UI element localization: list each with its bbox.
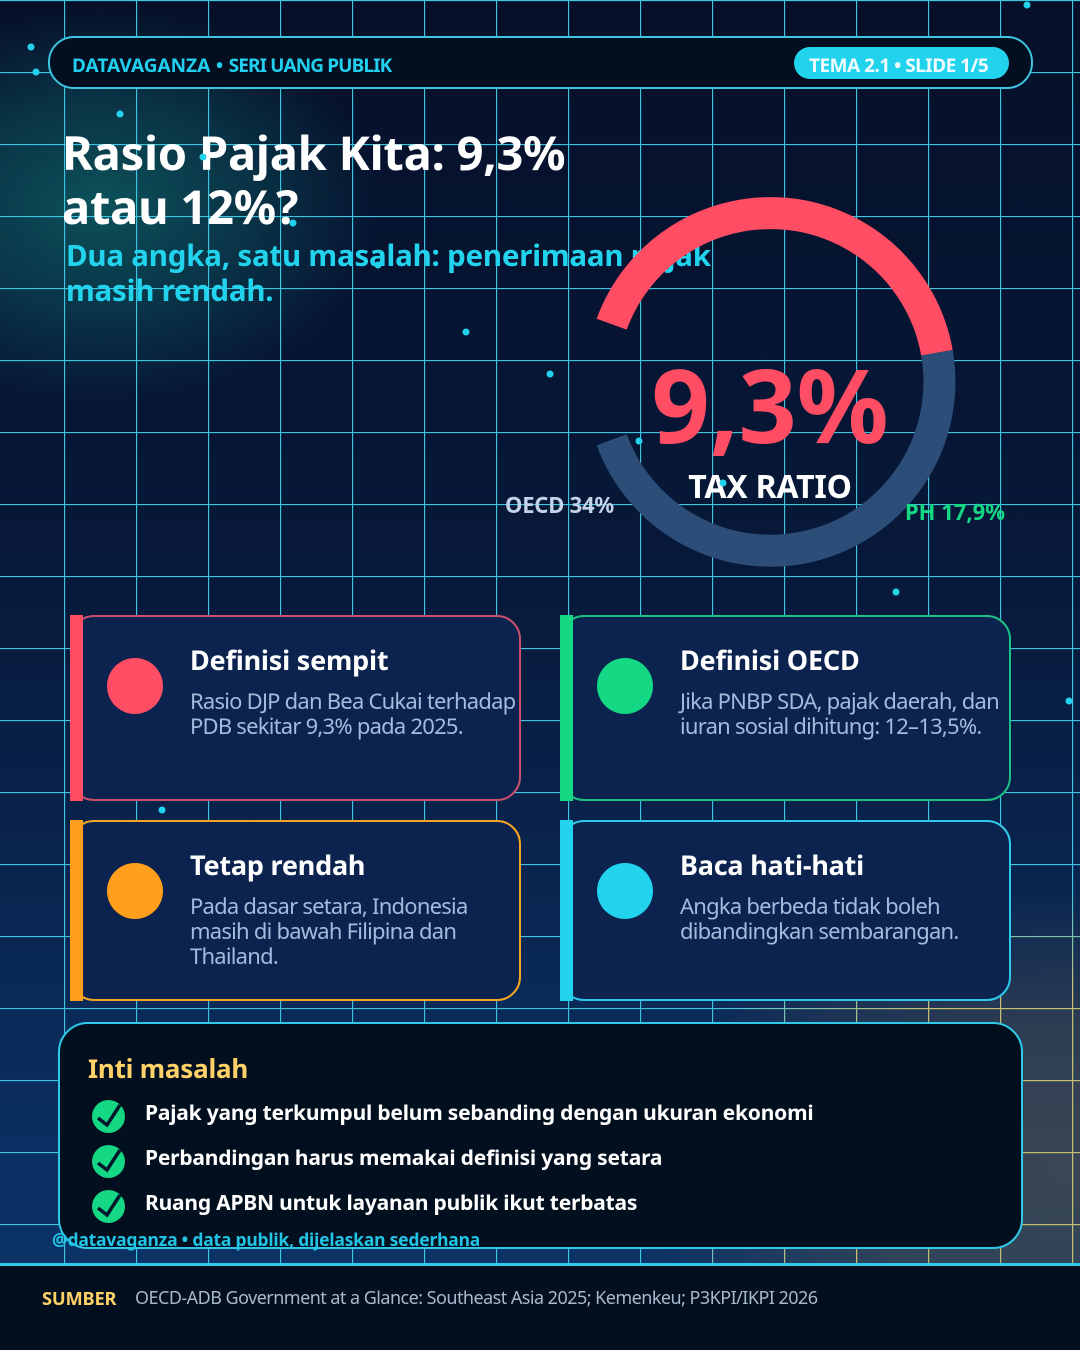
card: definisi OECD: Jika PNBP SDA, pajak daerah, dan — [680, 686, 999, 716]
subtitle: Dua angka, satu masalah: penerimaan pajak — [66, 234, 711, 275]
card: definisi sempit: PDB sekitar 9,3% pada 2025. — [190, 711, 463, 741]
card: tetap rendah: Tetap rendah — [190, 846, 365, 883]
card: definisi OECD — [560, 615, 1011, 801]
card: definisi OECD: iuran sosial dihitung: 12–13,5%. — [680, 711, 982, 741]
label: OECD: OECD 34% — [505, 490, 614, 520]
slide pill — [794, 47, 1009, 79]
label: Philippines: PH 17,9% — [905, 497, 1005, 527]
card: tetap rendah: masih di bawah Filipina dan — [190, 916, 456, 946]
card: definisi sempit: Rasio DJP dan Bea Cukai terhadap — [190, 686, 515, 716]
item 2: Perbandingan harus memakai definisi yang setara — [145, 1144, 662, 1172]
card: baca hati-hati: Baca hati-hati — [680, 846, 864, 883]
header bar — [48, 36, 1033, 89]
panel heading: Inti masalah — [88, 1050, 248, 1086]
donut chart — [596, 197, 956, 567]
card: tetap rendah: Thailand. — [190, 941, 278, 971]
title: Rasio Pajak Kita: 9,3% — [62, 120, 565, 184]
title: atau 12%? — [62, 174, 298, 238]
card: tetap rendah — [70, 820, 521, 1001]
title — [62, 120, 565, 238]
big number: 9,3% — [652, 334, 888, 473]
item 3: Ruang APBN untuk layanan publik ikut terbatas — [145, 1189, 637, 1217]
subtitle — [66, 234, 711, 310]
slide pill: TEMA 2.1 • SLIDE 1/5 — [809, 52, 988, 78]
arc: remainder — [612, 353, 939, 551]
card: baca hati-hati: Angka berbeda tidak boleh — [680, 891, 940, 921]
card: tetap rendah: Pada dasar setara, Indonesia — [190, 891, 468, 921]
card: baca hati-hati — [560, 820, 1011, 1001]
footer — [0, 1263, 1080, 1350]
arc: tax ratio — [612, 213, 937, 353]
source text: OECD-ADB Government at a Glance: Southeast Asia 2025; Kemenkeu; P3KPI/IKPI 2026 — [135, 1286, 818, 1310]
card: definisi OECD: Definisi OECD — [680, 641, 860, 678]
header label: DATAVAGANZA • SERI UANG PUBLIK — [72, 52, 391, 78]
card: definisi sempit — [70, 615, 521, 801]
subtitle: masih rendah. — [66, 269, 273, 310]
tax ratio label: TAX RATIO — [688, 465, 852, 508]
checklist icons — [92, 1100, 125, 1223]
handle: @datavaganza • data publik, dijelaskan sederhana — [52, 1228, 480, 1252]
card: definisi sempit: Definisi sempit — [190, 641, 388, 678]
card: baca hati-hati: dibandingkan sembarangan. — [680, 916, 958, 946]
item 1: Pajak yang terkumpul belum sebanding dengan ukuran ekonomi — [145, 1099, 813, 1127]
source label: SUMBER — [42, 1286, 116, 1311]
